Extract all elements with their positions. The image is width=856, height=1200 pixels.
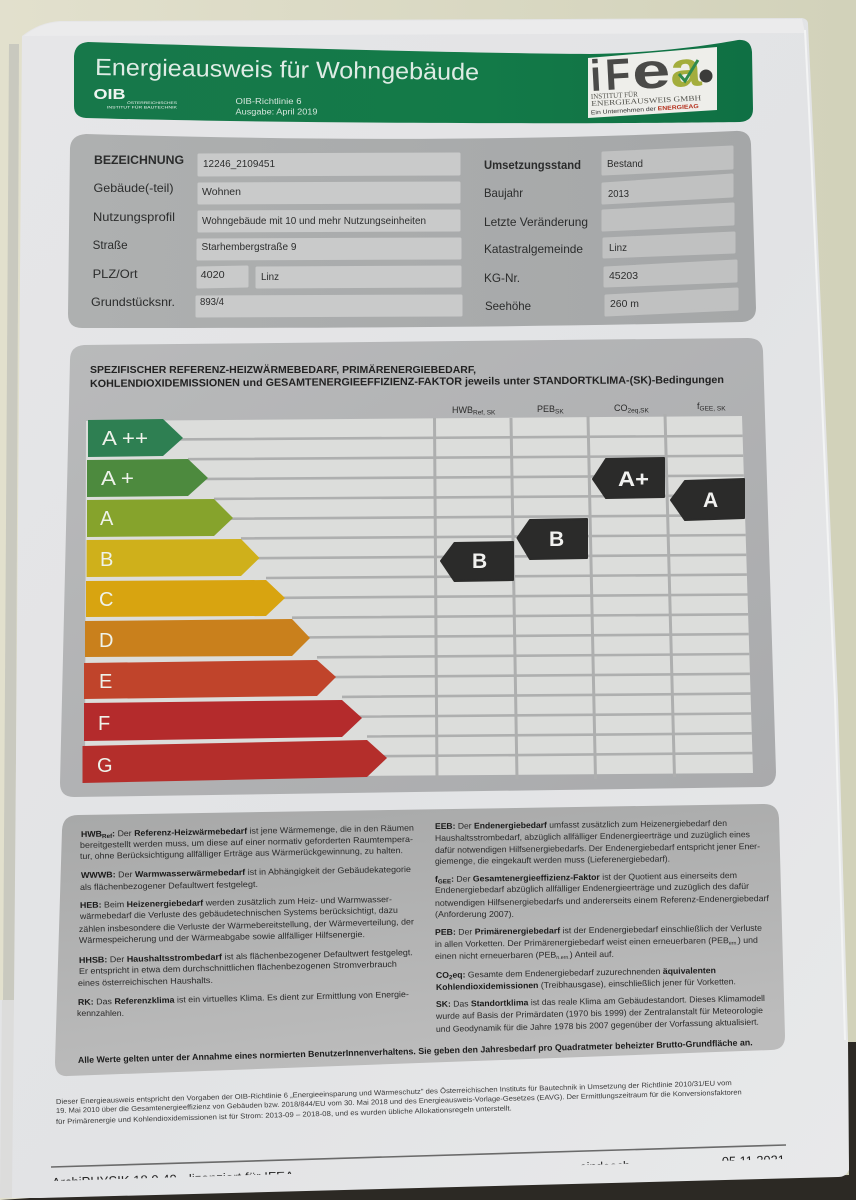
- right labels: Katastralgemeinde: [484, 242, 583, 256]
- right definitions: in allen Vorketten. Der Primärenergiebedarf weist einen erneuerbaren (PEB: [435, 935, 715, 949]
- footnote: [56, 1079, 742, 1126]
- guideline info: OIB-Richtlinie 6: [236, 97, 302, 106]
- left definitions: [77, 823, 414, 1018]
- dark table edge: [0, 1042, 856, 1200]
- lower left shade: [0, 1000, 14, 1198]
- right values: 45203: [609, 270, 638, 282]
- right definitions: PEB: Der Primärenergiebedarf ist der Endenergiebedarf einschließlich der Verluste: [435, 923, 762, 937]
- right definitions: dafür notwendigen Hilfsenergiebedarfs. Der Endenergiebedarf entspricht jener Ener-: [435, 841, 760, 855]
- arrow B: [87, 539, 259, 577]
- right value fields: [603, 147, 737, 315]
- sleeve highlight right: [805, 30, 845, 1040]
- rating grid: [85, 414, 753, 779]
- left definitions: HHSB: Der Haushaltsstrombedarf ist als flächenbezogener Defaultwert festgelegt.: [79, 947, 413, 965]
- right definitions: n.ern.: [556, 955, 570, 961]
- right values: Bestand: [607, 158, 643, 170]
- ifea logo: a: [669, 40, 704, 98]
- ifea logo: F: [604, 50, 631, 100]
- rating marker HWB: B: B: [472, 550, 487, 573]
- footer rule: [51, 1145, 786, 1167]
- right definitions: f: [435, 874, 438, 884]
- arrow G: G: [97, 755, 113, 777]
- right definitions: Kohlendioxidemissionen (Treibhausgase), einschließlich jener für Vorketten.: [436, 976, 736, 992]
- ifea logo: [588, 40, 717, 118]
- footer text cut off: lizenziert für IFEA: [189, 1170, 295, 1185]
- left labels: [91, 153, 184, 309]
- column headers: CO: [614, 403, 628, 413]
- arrow A++: [88, 419, 183, 457]
- rating marker CO2: A+: A+: [618, 468, 649, 491]
- arrow C: [86, 580, 285, 617]
- sleeve highlight top: [24, 19, 805, 36]
- right labels: Letzte Veränderung: [484, 215, 588, 229]
- ifea logo: i: [589, 51, 603, 101]
- arrow G: [82, 740, 387, 783]
- left definitions: Der Referenz-Heizwärmebedarf ist jene Wärmemenge, die in den Räumen: [117, 823, 406, 838]
- left values: 12246_2109451: [203, 158, 275, 170]
- left definitions: wärmebedarf die Verluste des gebäudetechnischen Systems berücksichtigt, dazu: [79, 905, 398, 921]
- right definitions: CO: [436, 970, 450, 980]
- column headers: PEB: [537, 404, 555, 414]
- rating marker fGEE: A: A: [703, 489, 718, 512]
- left definitions: Ref: [102, 834, 113, 840]
- left labels: Gebäude(-teil): [94, 181, 174, 195]
- arrow F: F: [98, 713, 110, 735]
- right definitions: EEB: Der Endenergiebedarf umfasst zusätzlich zum Heizenergiebedarf den: [435, 818, 727, 831]
- left labels: BEZEICHNUNG: [94, 153, 184, 167]
- right values: 2013: [608, 188, 629, 200]
- column headers: GEE, SK: [700, 406, 726, 412]
- column headers: 2eq,SK: [628, 408, 649, 414]
- left definitions: Er entspricht in etwa dem durchschnittlichen flächenbezogenen Stromverbrauch: [79, 959, 397, 976]
- right definitions: Der Gesamtenergieeffizienz-Faktor ist der Quotient aus einerseits dem: [456, 870, 732, 884]
- plastic sleeve edge: [3, 44, 19, 1000]
- left definitions: zählen insbesondere die Verluste der Wärmebereitstellung, der Wärmeverteilung, der: [79, 916, 414, 934]
- left definitions: als flächenbezogener Defaultwert festgelegt.: [80, 879, 258, 892]
- rating marker PEB: B: B: [549, 528, 564, 551]
- left definitions: Wärmespeicherung und der Wärmeabgabe sowie allfälliger Hilfsenergie.: [79, 929, 365, 945]
- efficiency arrows: [82, 419, 387, 783]
- OIB logo: [94, 86, 178, 110]
- right definitions: eq:: [452, 969, 466, 980]
- right values: 260 m: [610, 298, 639, 310]
- left values: Starhembergstraße 9: [202, 241, 297, 253]
- right definitions: ): [738, 935, 741, 945]
- title: Energieausweis für Wohngebäude: [95, 54, 479, 85]
- left labels: PLZ/Ort: [93, 267, 138, 281]
- header banner: [74, 40, 753, 123]
- right definitions: [435, 818, 770, 1034]
- left labels: Grundstücksnr.: [91, 295, 175, 309]
- column headers: f: [697, 401, 700, 411]
- right definitions: 2: [449, 975, 453, 981]
- guideline info: Ausgabe: April 2019: [236, 108, 318, 116]
- left definitions: :: [112, 828, 115, 838]
- arrow A++: A ++: [102, 428, 148, 450]
- left values: [200, 158, 426, 308]
- footnote: 19. Mai 2010 über die Gesamtenergieeffizienz von Gebäuden bzw. 2018/844/EU vom 30. Mai 2018 und des Energieausweis-Vorlage-Gesetzes (EAVG). Der Ermittlungszeitraum für die Konversionsfaktoren: [56, 1089, 742, 1115]
- right definitions: Anteil auf.: [574, 949, 612, 959]
- right definitions: Haushaltsstrombedarf, abzüglich allfälliger Endenergieerträge und zuzüglich eines: [435, 829, 750, 843]
- left values: 893/4: [200, 296, 224, 308]
- panel: building data: [68, 131, 756, 328]
- right labels: Baujahr: [484, 186, 523, 200]
- ifea logo: Ein Unternehmen der ENERGIEAG: [591, 104, 699, 116]
- left definitions: WWWB: Der Warmwasserwärmebedarf ist in Abhängigkeit der Gebäudekategorie: [81, 864, 411, 880]
- footnote: für Primärenergie und Kohlendioxidemissionen ist für Strom: 2013-09 – 2018-08, und es wurden übliche Allokationsregeln unterstellt.: [56, 1105, 512, 1126]
- right definitions: notwendigen Hilfsenergiebedarfs und andererseits einem Referenz-Endenergiebedarf: [435, 893, 770, 908]
- ifea logo: ENERGIEAUSWEIS GMBH: [591, 93, 702, 108]
- ifea logo: INSTITUT FÜR: [591, 90, 638, 101]
- heading: [90, 363, 724, 390]
- right definitions: Endenergiebedarf abzüglich allfälliger Endenergieerträge und zuzüglich des dafür: [435, 881, 749, 895]
- heading: SPEZIFISCHER REFERENZ-HEIZWÄRMEBEDARF, PRIMÄRENERGIEBEDARF,: [90, 363, 476, 376]
- left definitions: HEB: Beim Heizenergiebedarf werden zusätzlich zum Heiz- und Warmwasser-: [80, 894, 392, 910]
- ifea logo: e: [631, 42, 672, 100]
- panel: energy ratings: [60, 338, 776, 797]
- footer text cut off: ArchiPHYSIK 18.0.40: [52, 1172, 177, 1190]
- right definitions: ): [570, 949, 573, 959]
- right definitions: :: [451, 874, 454, 884]
- left values: Wohngebäude mit 10 und mehr Nutzungseinheiten: [202, 215, 426, 227]
- arrow A+: A +: [101, 468, 134, 490]
- arrow D: D: [99, 630, 113, 652]
- right labels: Seehöhe: [485, 299, 531, 313]
- left definitions: tur, ohne Berücksichtigung allfälliger Erträge aus Wärmerückgewinnung, zu halten.: [80, 845, 403, 861]
- arrow D: [85, 619, 310, 657]
- arrow A: [87, 499, 233, 537]
- right definitions: (Anforderung 2007).: [435, 909, 514, 919]
- left value fields: [197, 154, 461, 316]
- right values: [607, 158, 643, 310]
- footer text cut off: eindeach: [580, 1159, 630, 1174]
- column headers: SK: [555, 408, 564, 416]
- arrow A: A: [100, 508, 114, 530]
- right values: Linz: [609, 242, 627, 254]
- left definitions: eines österreichischen Haushalts.: [78, 975, 213, 988]
- arrow C: C: [99, 589, 113, 611]
- left values: Wohnen: [202, 186, 241, 198]
- right labels: [484, 158, 588, 313]
- right definitions: und: [743, 935, 757, 945]
- rating marker fGEE: A: [671, 479, 744, 520]
- left definitions: RK: Das Referenzklima ist ein virtuelles Klima. Es dient zur Ermittlung von Energie-: [78, 989, 409, 1007]
- right definitions: Gesamte dem Endenergiebedarf zuzurechnenden äquivalenten: [468, 965, 714, 979]
- arrow F: [84, 700, 362, 741]
- left labels: Nutzungsprofil: [93, 210, 175, 224]
- right labels: Umsetzungsstand: [484, 158, 581, 172]
- summary note: Alle Werte gelten unter der Annahme eines normierten BenutzerInnenverhaltens. Sie geben den Jahresbedarf pro Quadratmeter beheizter Brutto-Grundfläche an.: [78, 1037, 753, 1065]
- right definitions: wurde auf Basis der Primärdaten (1970 bis 1999) der Zentralanstalt für Meteorologie: [435, 1005, 763, 1021]
- OIB logo: ÖSTERREICHISCHES: [127, 101, 178, 105]
- OIB logo: OIB: [94, 86, 126, 103]
- guideline info: [236, 97, 318, 116]
- right definitions: ern.: [729, 941, 738, 947]
- column headers: Ref, SK: [473, 410, 496, 416]
- rating marker PEB: B: [518, 519, 587, 559]
- left values: 4020: [201, 269, 225, 281]
- column headers: [452, 401, 726, 416]
- rating marker HWB: B: [441, 542, 513, 581]
- heading: KOHLENDIOXIDEMISSIONEN und GESAMTENERGIEEFFIZIENZ-FAKTOR jeweils unter STANDORTKLIMA-(SK)-Bedingungen: [90, 374, 724, 390]
- left definitions: HWB: [81, 829, 102, 839]
- left definitions: kennzahlen.: [77, 1008, 124, 1018]
- right definitions: SK: Das Standortklima ist das reale Klima am Gebäudestandort. Dieses Klimamodell: [436, 993, 765, 1009]
- left values: Linz: [261, 271, 279, 283]
- right definitions: und Geodynamik für die Jahre 1978 bis 2007 gegenüber der Vorfassung aktualisiert.: [436, 1017, 759, 1034]
- OIB logo: INSTITUT FÜR BAUTECHNIK: [107, 106, 178, 110]
- column headers: HWB: [452, 405, 473, 415]
- footer text cut off: [54, 1156, 782, 1181]
- arrow E: [84, 660, 336, 699]
- right definitions: einen nicht erneuerbaren (PEB: [435, 950, 550, 961]
- arrow A+: [87, 459, 208, 497]
- panel: definitions: [55, 804, 785, 1076]
- left labels: Straße: [93, 238, 128, 252]
- left definitions: bereitgestellt werden muss, um diese auf einer normativ geforderten Raumtempera-: [80, 834, 413, 850]
- right labels: KG-Nr.: [484, 271, 520, 285]
- right definitions: giemenge, die eingekauft werden muss (Lieferenergiebedarf).: [435, 854, 670, 866]
- rating marker CO2: A+: [593, 458, 664, 498]
- right definitions: GEE: [438, 879, 451, 885]
- footnote: Dieser Energieausweis entspricht den Vorgaben der OIB-Richtlinie 6 „Energieeinsparung und Wärmeschutz" des Österreichischen Instituts für Bautechnik in Umsetzung der Richtlinie 2010/31/EU vom: [56, 1079, 732, 1106]
- arrow B: B: [100, 549, 113, 571]
- arrow E: E: [99, 671, 112, 693]
- footer text cut off: 05.11.2021: [722, 1152, 785, 1169]
